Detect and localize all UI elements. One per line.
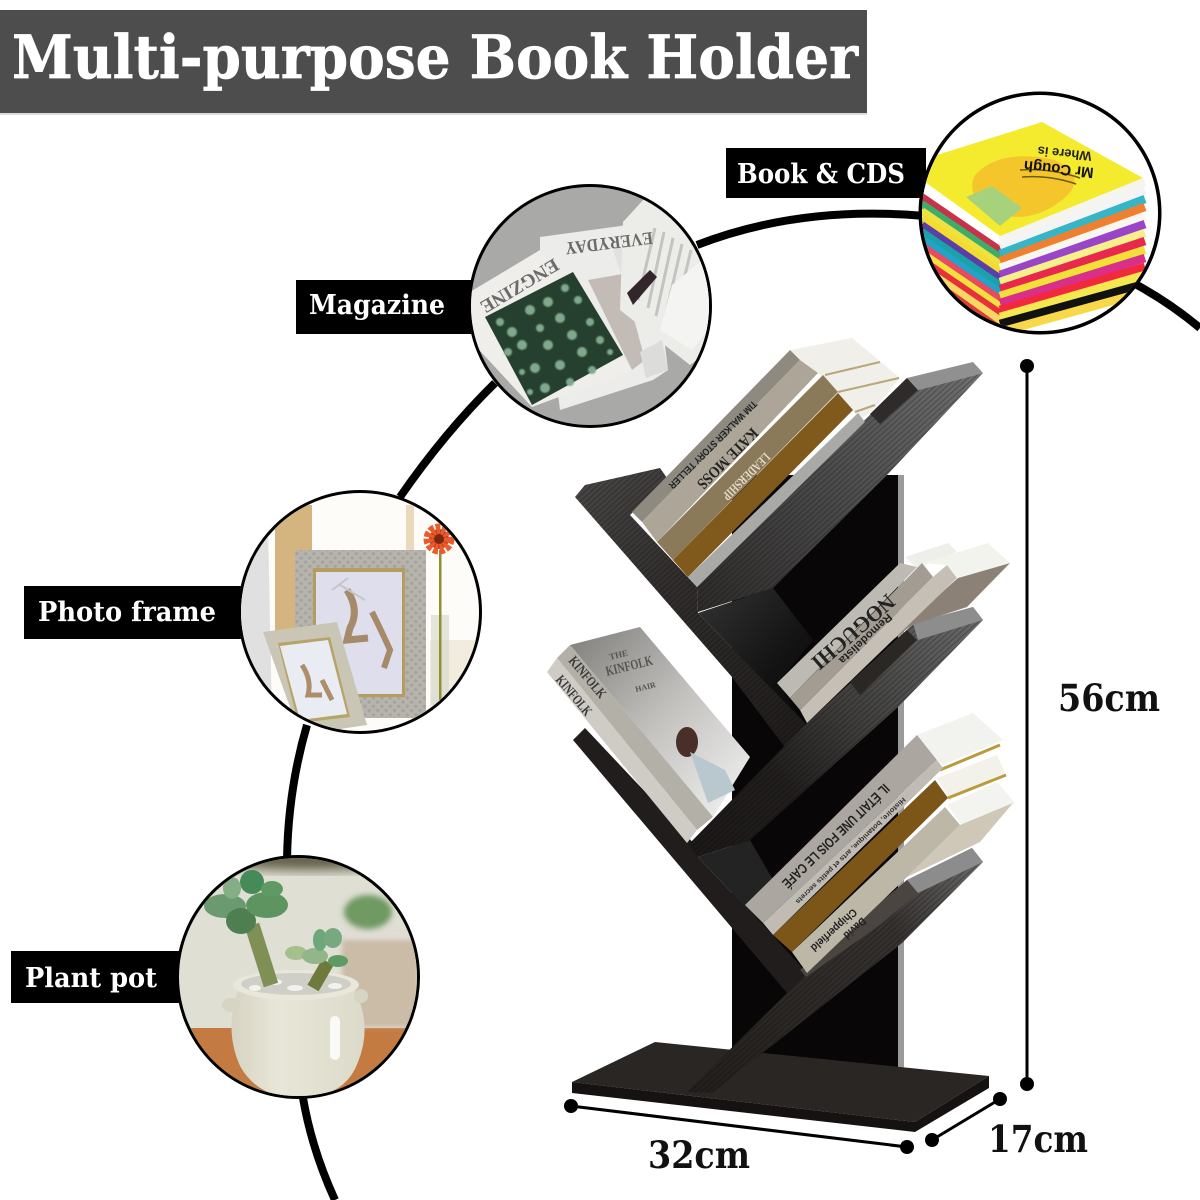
label: Book & CDS: Book & CDS — [737, 159, 905, 190]
kinfolk books: KINFOLK — [604, 654, 655, 680]
title banner: Multi-purpose Book Holder — [12, 23, 859, 93]
circle photo: stacked books — [918, 92, 1162, 336]
upper right branch — [697, 362, 983, 612]
base board — [572, 1042, 989, 1132]
top shelf books — [632, 338, 900, 587]
label: Photo frame: Photo frame — [38, 597, 216, 628]
circle photo: stacked books: Where is — [1037, 143, 1092, 164]
dimension: height 56cm — [1020, 359, 1160, 1091]
label: Plant pot: Plant pot — [25, 963, 157, 994]
dimension: depth 17cm: 17cm — [988, 1117, 1088, 1161]
kinfolk books: THE — [608, 648, 629, 662]
middle right branch — [688, 607, 983, 857]
top shelf books: TIM WALKER STORY TELLER — [666, 398, 759, 491]
connecting arc — [287, 214, 1200, 1200]
dimension: depth 17cm — [925, 1092, 1088, 1161]
label: Plant pot — [11, 951, 185, 1003]
middle left branch — [573, 728, 807, 993]
upper left branch — [575, 468, 808, 762]
circle photo: magazines — [468, 184, 716, 428]
lower shelf books: IL ÉTAIT UNE FOIS LE CAFÉ — [779, 781, 893, 892]
lower right branch — [687, 848, 983, 1093]
second shelf books: NOGUCHI — [807, 589, 900, 675]
kinfolk books: KINFOLK — [565, 654, 609, 702]
kinfolk books — [547, 627, 750, 843]
dimension: width 32cm: 32cm — [648, 1133, 750, 1177]
circle photo: stacked books: Mr Cough — [1023, 157, 1094, 181]
title banner — [0, 10, 867, 115]
circle photo: magazines: EVERYDAY — [564, 228, 654, 259]
label: Magazine: Magazine — [309, 290, 445, 321]
inner compartments — [698, 588, 813, 973]
circle photo: picture frames — [238, 490, 482, 735]
circle photo: magazines: ENGZINE — [476, 254, 562, 317]
kinfolk books: KINFOLK — [552, 673, 594, 719]
label: Magazine — [296, 280, 480, 334]
back panel — [732, 475, 904, 1069]
stack left face — [922, 190, 1004, 332]
dimension: height 56cm: 56cm — [1058, 676, 1160, 720]
lower shelf books — [745, 713, 1015, 973]
lower shelf books: Histoire, botanique, arts et petits secrets — [794, 796, 906, 905]
circle photo: succulent plant pot — [176, 850, 420, 1108]
lower shelf books: David — [841, 915, 868, 941]
tree-shaped bookshelf — [547, 338, 1015, 1132]
dimension: width 32cm — [564, 1099, 914, 1177]
top shelf books: KATE MOSS — [693, 424, 761, 492]
label: Photo frame — [24, 586, 246, 639]
stack right face — [1000, 182, 1145, 332]
kinfolk books: HAIR — [634, 680, 657, 694]
yellow book cover — [925, 122, 1143, 236]
lower shelf books: Chipperfield — [808, 906, 859, 953]
second shelf books: Remodelista — [836, 611, 894, 667]
second shelf books — [777, 543, 1010, 723]
top shelf books: LEADERSHIP — [720, 450, 773, 504]
label: Book & CDS — [726, 148, 926, 198]
